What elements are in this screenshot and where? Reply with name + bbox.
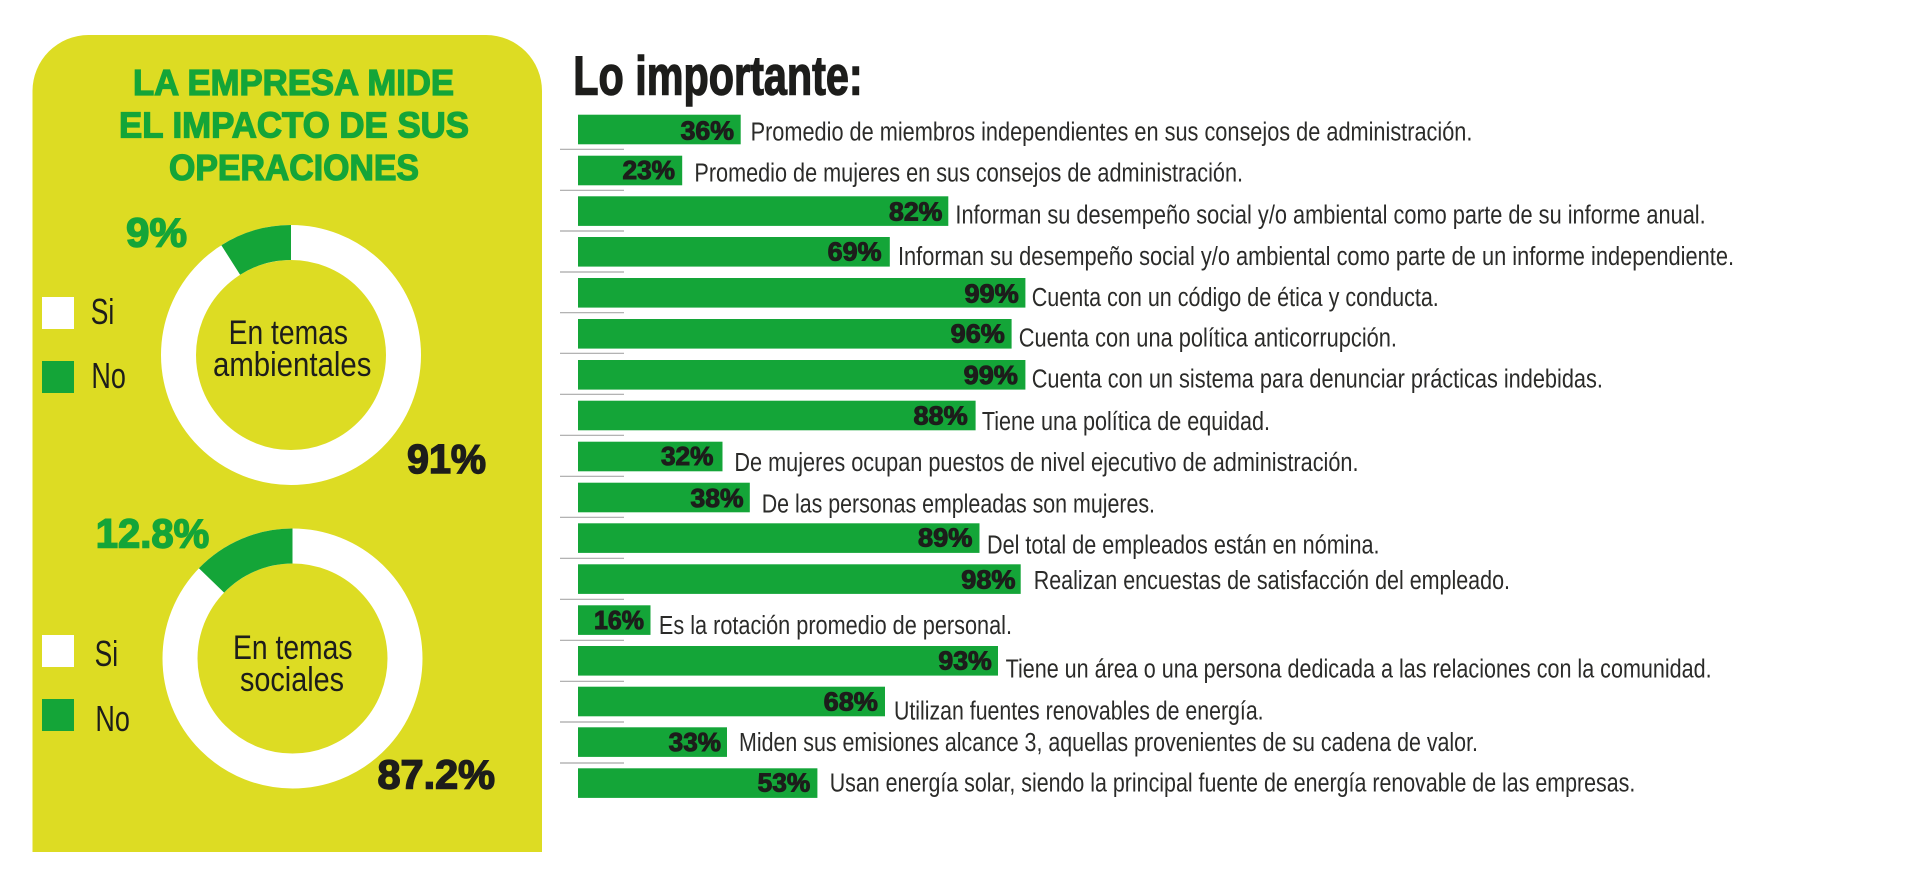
row: 89% nomina: Del total de empleados están en nómina. [987, 531, 1380, 559]
row: 99% codigo de etica: 99% [964, 280, 1019, 308]
row: 33% alcance 3: Miden sus emisiones alcance 3, aquellas provenientes de su cadena de valor. [739, 729, 1478, 757]
title: lo importante: Lo importante: [573, 45, 863, 106]
row: 98% encuestas [578, 564, 1510, 595]
row: 98% encuestas: 98% [961, 566, 1016, 594]
row: 68% renovables [578, 687, 1264, 725]
row: 93% comunidad: 93% [938, 647, 992, 675]
row: 38% empleadas [578, 483, 1155, 518]
row: 16% rotacion [578, 605, 1012, 640]
panel heading: EL IMPACTO DE SUS [119, 104, 469, 146]
row: 93% comunidad [578, 646, 1712, 683]
donut chart: en temas sociales: sociales [240, 661, 344, 699]
donut chart: en temas sociales: En temas [233, 629, 352, 667]
row: 99% codigo de etica [578, 278, 1439, 312]
row: 23% mujeres en consejos [578, 156, 1243, 188]
row: 32% mujeres ejecutivas: 32% [661, 443, 713, 471]
row: 38% empleadas: 38% [690, 485, 744, 513]
row: 23% mujeres en consejos: 23% [622, 157, 675, 185]
legend: ambientales: No [91, 355, 126, 396]
row: 96% anticorrupcion [578, 319, 1397, 353]
row: 36% miembros independientes: 36% [681, 117, 734, 145]
value: 91% si: 91% [407, 436, 486, 482]
donut chart: en temas ambientales: ambientales [213, 346, 371, 384]
row: 99% codigo de etica: Cuenta con un código de ética y conducta. [1032, 284, 1439, 312]
row: 23% mujeres en consejos: Promedio de mujeres en sus consejos de administración. [694, 160, 1243, 188]
row: 88% equidad: Tiene una política de equidad. [982, 408, 1270, 436]
row: 99% denuncias [578, 360, 1603, 394]
panel heading: OPERACIONES [169, 147, 419, 188]
row: 53% energia solar: Usan energía solar, siendo la principal fuente de energía renovable de las empresas. [830, 770, 1635, 798]
row: 53% energia solar [578, 768, 1635, 798]
legend: sociales [42, 633, 130, 739]
row: 68% renovables: 68% [824, 688, 878, 716]
row: 98% encuestas: Realizan encuestas de satisfacción del empleado. [1034, 567, 1510, 595]
legend: ambientales: Si [91, 291, 114, 332]
row: 32% mujeres ejecutivas: De mujeres ocupan puestos de nivel ejecutivo de administración. [734, 449, 1358, 477]
row: 53% energia solar: 53% [758, 769, 810, 797]
row: 33% alcance 3 [578, 727, 1478, 757]
row: 89% nomina: 89% [918, 525, 972, 553]
row: 16% rotacion: Es la rotación promedio de personal. [659, 612, 1012, 640]
row: 96% anticorrupcion: 96% [951, 321, 1005, 349]
panel: la empresa mide el impacto [32, 35, 542, 852]
row: 96% anticorrupcion: Cuenta con una política anticorrupción. [1019, 325, 1397, 353]
row: 88% equidad [578, 401, 1270, 436]
row: 38% empleadas: De las personas empleadas son mujeres. [762, 490, 1155, 518]
value: 87.2% si: 87.2% [378, 752, 495, 798]
donut chart: en temas ambientales: En temas [229, 314, 348, 352]
row: 16% rotacion: 16% [594, 607, 644, 635]
value: 12.8% no: 12.8% [96, 511, 209, 557]
row: 99% denuncias: 99% [964, 362, 1018, 390]
row: 93% comunidad: Tiene un área o una persona dedicada a las relaciones con la comunidad. [1006, 655, 1712, 683]
row: 33% alcance 3: 33% [669, 729, 721, 757]
legend: ambientales [42, 291, 126, 396]
row: 82% informe anual: Informan su desempeño social y/o ambiental como parte de su informe anual. [955, 201, 1706, 229]
value: 9% no: 9% [126, 210, 187, 256]
row: 89% nomina [578, 523, 1380, 559]
legend: sociales: No [95, 698, 130, 739]
donut chart: en temas ambientales [178, 225, 404, 468]
row: 82% informe anual [578, 196, 1706, 229]
row: 82% informe anual: 82% [889, 198, 942, 226]
row: 36% miembros independientes: Promedio de miembros independientes en sus consejos de administración. [751, 119, 1472, 147]
row: 68% renovables: Utilizan fuentes renovables de energía. [894, 697, 1264, 725]
row: 88% equidad: 88% [914, 403, 968, 431]
row: 69% informe independiente: Informan su desempeño social y/o ambiental como parte de un informe independiente. [898, 243, 1734, 271]
row: 69% informe independiente [578, 237, 1734, 271]
donut chart: en temas sociales [180, 528, 405, 771]
bar chart: indicadores [560, 115, 1734, 798]
row: 99% denuncias: Cuenta con un sistema para denunciar prácticas indebidas. [1032, 366, 1603, 394]
panel heading: LA EMPRESA MIDE [133, 62, 454, 103]
row: 36% miembros independientes [578, 115, 1472, 147]
panel heading [119, 62, 469, 188]
row: 32% mujeres ejecutivas [578, 442, 1358, 477]
row: 69% informe independiente: 69% [828, 239, 882, 267]
legend: sociales: Si [95, 633, 118, 674]
